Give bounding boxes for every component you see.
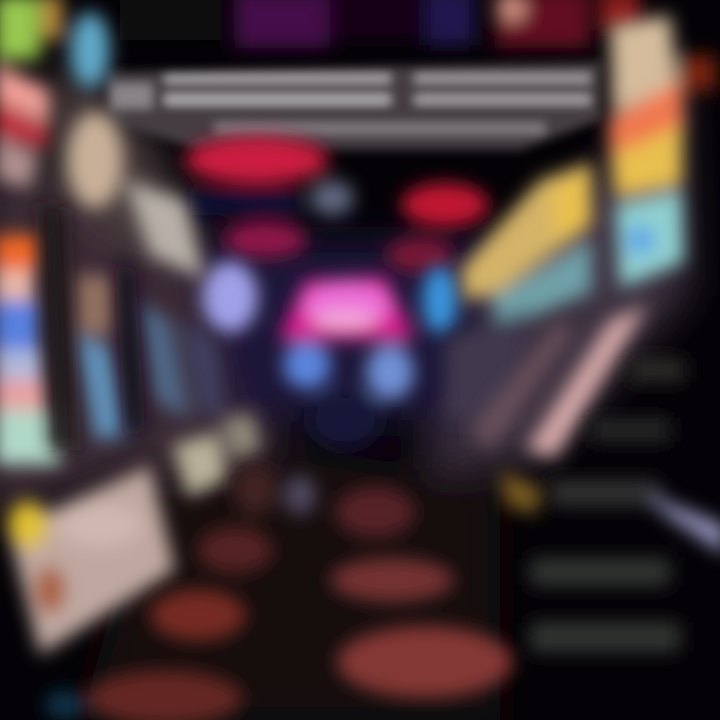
right staircase	[530, 358, 720, 652]
red carpet seats	[45, 464, 513, 720]
diagonal pink light strip	[470, 305, 648, 515]
blurred title text	[105, 62, 600, 150]
bottom left screen	[8, 412, 262, 655]
ceiling colour bands	[120, 0, 640, 48]
red and pink ceiling lights	[185, 136, 489, 273]
central glowing machines	[202, 261, 458, 448]
left wall machines	[0, 0, 225, 465]
left wall dark pillars	[40, 200, 145, 450]
right wall machines	[445, 15, 716, 420]
